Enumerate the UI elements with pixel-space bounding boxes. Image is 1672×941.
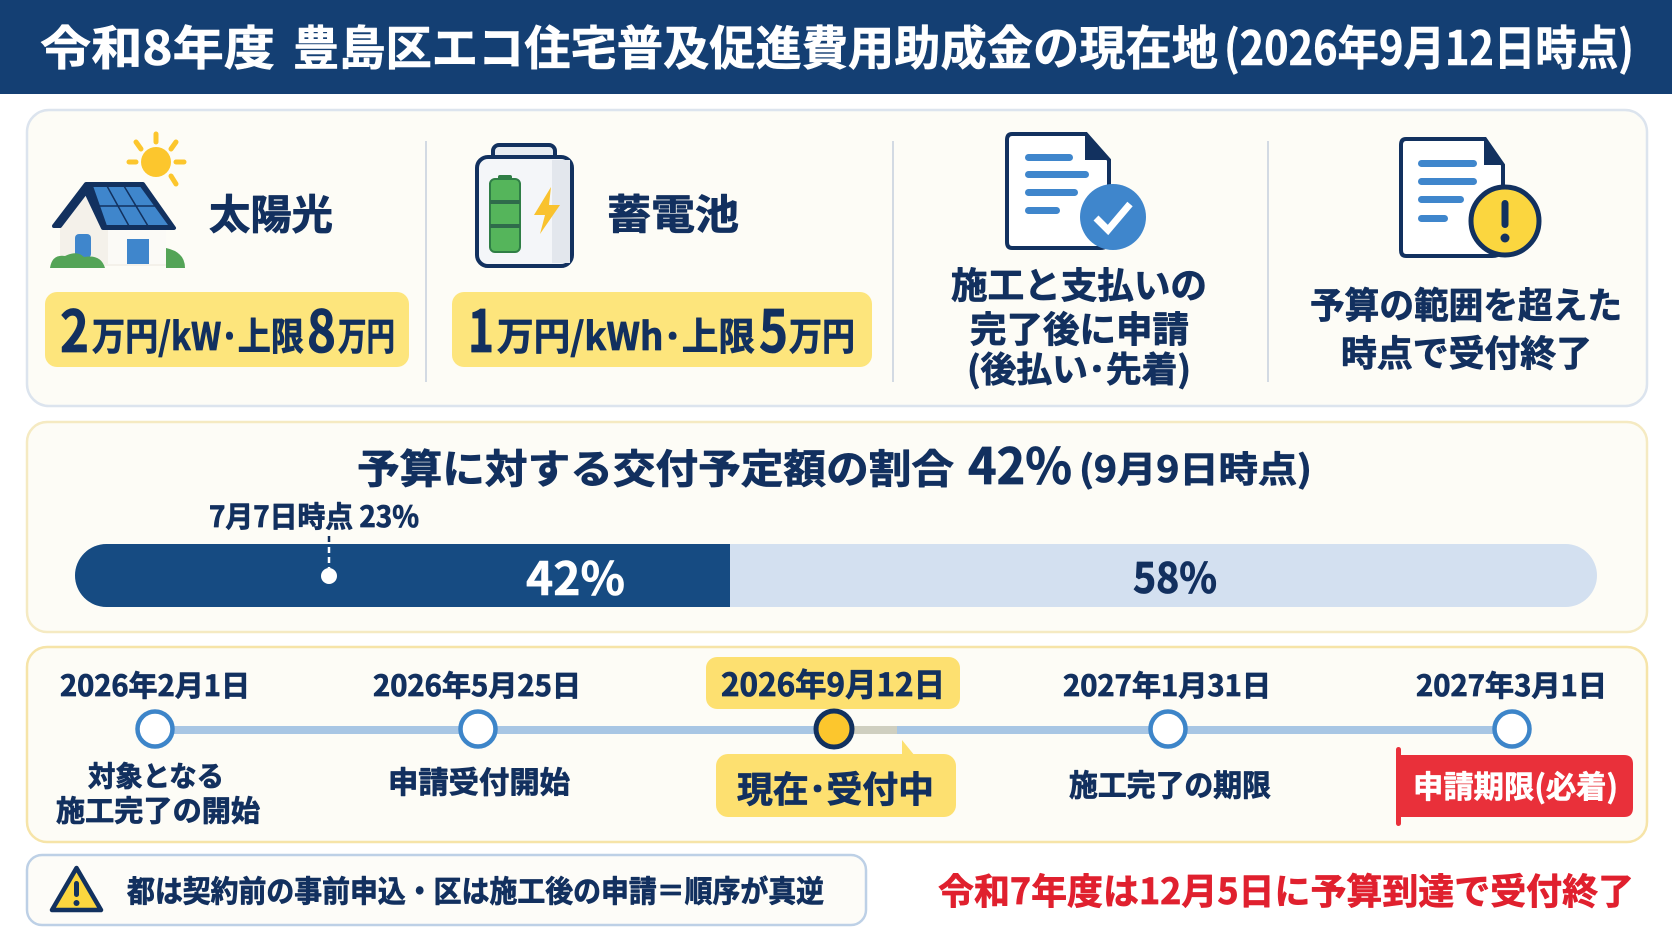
milestone: 2026-05-25: 2026年5月25日 xyxy=(373,663,581,705)
pill: battery subsidy amount: 万円 xyxy=(789,306,855,361)
heading: budget ratio xyxy=(357,427,1312,499)
pill: battery subsidy amount: 1 xyxy=(468,285,494,369)
note: last year's end date: 令和7年度は12月5日に予算到達で受付終了 xyxy=(938,863,1634,915)
milestone: 2026-05-25 xyxy=(373,663,581,802)
text: apply after completion: (後払い･先着) xyxy=(967,342,1191,393)
pill: battery subsidy amount: 万円/kWh･上限 xyxy=(497,306,755,361)
panel: subsidy summary xyxy=(27,110,1647,406)
milestone: 2027-03-01 deadline xyxy=(1396,663,1633,826)
heading: budget ratio: 42% xyxy=(968,427,1072,499)
text: apply after completion: 完了後に申請 xyxy=(970,301,1189,353)
progress bar: 58% xyxy=(1133,545,1217,606)
milestone: current date 2026-09-12: 現在･受付中 xyxy=(737,761,934,813)
milestone: 2026-05-25: 申請受付開始 xyxy=(388,758,570,802)
marker: July 7 at 23%: 7月7日時点 23% xyxy=(209,494,419,536)
text: ends when budget exceeded xyxy=(1310,277,1622,377)
pill: solar subsidy amount: 万円/kW･上限 xyxy=(92,306,304,361)
heading: budget ratio: 予算に対する交付予定額の割合 xyxy=(357,437,954,495)
callout: order warning xyxy=(27,855,866,925)
progress bar xyxy=(75,543,1597,609)
text: apply after completion: 施工と支払いの xyxy=(951,257,1207,309)
heading: budget ratio: (9月9日時点) xyxy=(1079,441,1312,493)
title banner: 令和8年度 xyxy=(40,10,275,79)
milestone: 2027-01-31 xyxy=(1063,663,1271,805)
text: ends when budget exceeded: 時点で受付終了 xyxy=(1341,325,1592,377)
milestone: current date 2026-09-12 xyxy=(706,657,960,817)
milestone: 2026-02-01: 2026年2月1日 xyxy=(60,663,250,705)
text: apply after completion xyxy=(951,257,1207,393)
milestone: current date 2026-09-12: 2026年9月12日 xyxy=(721,660,945,706)
icon: battery xyxy=(477,145,572,266)
heading: solar: 太陽光 xyxy=(209,181,333,241)
milestone: 2026-02-01: 施工完了の開始 xyxy=(56,788,260,830)
milestone: 2026-02-01 xyxy=(56,663,260,830)
heading: battery: 蓄電池 xyxy=(607,181,739,241)
progress bar: 42% xyxy=(526,543,625,609)
text: ends when budget exceeded: 予算の範囲を超えた xyxy=(1310,277,1622,329)
milestone: 2027-03-01 deadline: 申請期限(必着) xyxy=(1413,762,1618,807)
pill: battery subsidy amount: 5 xyxy=(759,285,788,369)
pill: solar subsidy amount xyxy=(45,285,409,369)
milestone: 2027-01-31: 2027年1月31日 xyxy=(1063,663,1271,705)
icon: warning triangle xyxy=(52,868,101,910)
panel: budget progress xyxy=(27,422,1647,632)
pill: solar subsidy amount: 万円 xyxy=(338,306,395,361)
panel: timeline xyxy=(27,647,1647,842)
icon: document with check xyxy=(1007,134,1146,250)
marker: July 7 at 23% xyxy=(209,494,419,584)
callout: order warning: 都は契約前の事前申込・区は施工後の申請＝順序が真逆 xyxy=(127,867,824,911)
icon: document with warning xyxy=(1401,139,1539,256)
milestone: 2027-01-31: 施工完了の期限 xyxy=(1069,761,1271,805)
milestone: 2027-03-01 deadline: 2027年3月1日 xyxy=(1416,663,1607,705)
icon: solar house xyxy=(50,134,185,268)
pill: battery subsidy amount xyxy=(452,285,872,369)
title banner xyxy=(0,0,1672,94)
pill: solar subsidy amount: 2 xyxy=(60,285,89,369)
pill: solar subsidy amount: 8 xyxy=(307,285,336,369)
title banner: 豊島区エコ住宅普及促進費用助成金の現在地 xyxy=(293,10,1218,79)
milestone: 2026-02-01: 対象となる xyxy=(88,755,224,795)
